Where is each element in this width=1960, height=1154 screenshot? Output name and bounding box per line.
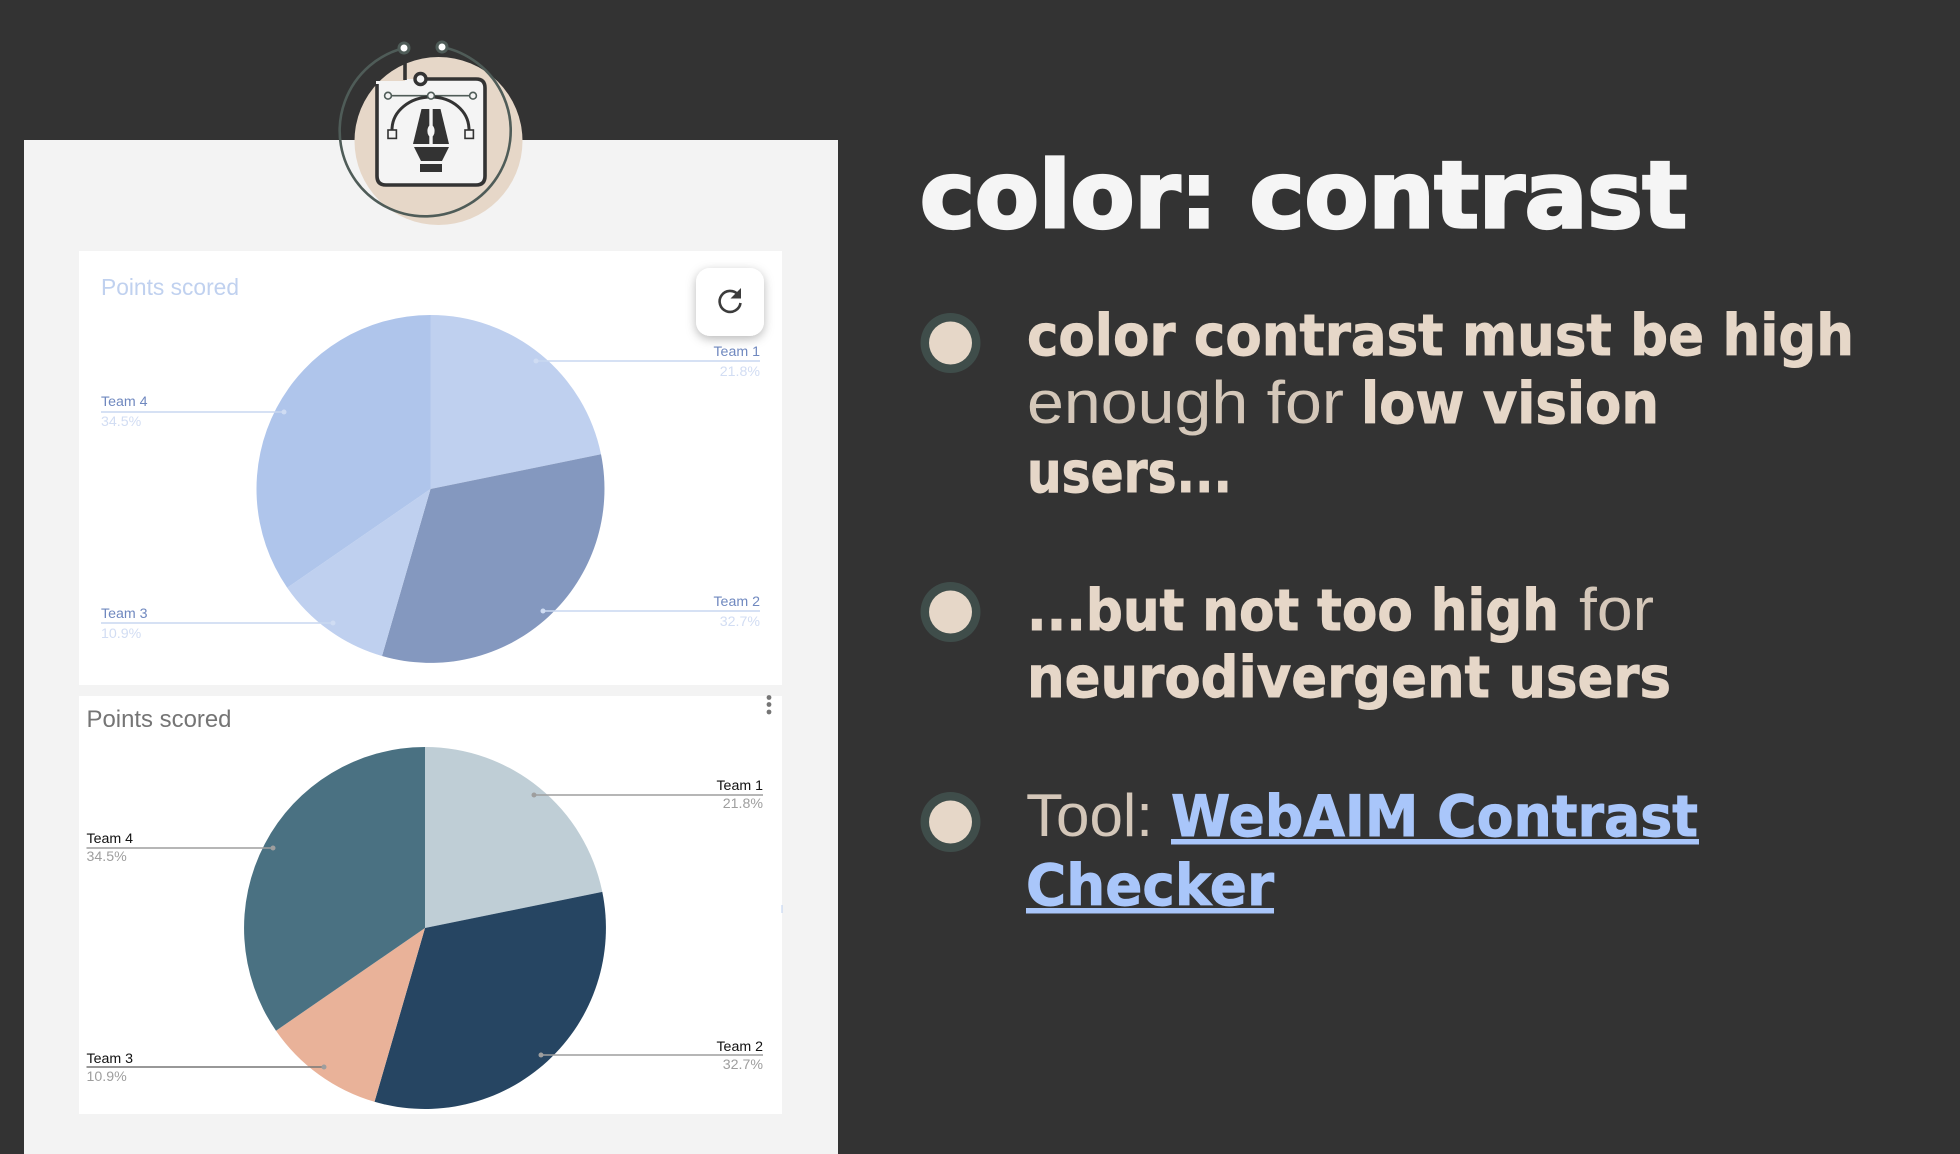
bullet text: ...but not too high [1027,578,1559,644]
label: team 1: Team 1 [716,778,763,794]
label: team 4: 34.5% [101,414,142,430]
label: team 2 [540,594,760,630]
bullet text with link: Checker [1026,853,1274,919]
label: team 3: Team 3 [101,606,148,622]
bullet marker [920,313,980,373]
title: color: contrast [920,142,1687,249]
label: team 3: 10.9% [86,1069,127,1085]
label: team 1: Team 1 [713,344,760,360]
label: team 4: Team 4 [86,831,133,847]
label: team 3 [86,1051,326,1085]
label: team 1 [534,344,760,380]
label: team 2 [538,1039,763,1073]
panel: chart comparison [24,140,838,1154]
label: team 4 [101,394,286,430]
bullet 1 [920,303,1854,506]
label: team 3 [101,606,336,642]
label: team 4: 34.5% [86,849,127,865]
bullet 2 [920,576,1671,711]
label: team 2: 32.7% [720,614,760,630]
label: team 3: Team 3 [86,1051,133,1067]
icon: vector pen tool [340,42,522,225]
label: team 3: 10.9% [101,626,142,642]
panel: low contrast pie chart [79,251,782,685]
chart title: low contrast: Points scored [101,274,239,300]
label: team 4 [86,831,276,865]
bullet text: low vision [1361,371,1659,437]
bullet text: enough for [1027,369,1344,436]
label: team 1: 21.8% [723,796,763,812]
label: team 1 [532,778,763,812]
bullet text: for [1579,576,1654,643]
bullet text [1027,576,1671,711]
bullet text [1027,303,1854,506]
bullet text: color contrast must be high [1027,303,1854,369]
label: team 4: Team 4 [101,394,148,410]
panel: accessible pie chart [79,695,782,1114]
chart title: accessible: Points scored [86,707,232,733]
pie: low contrast [256,315,604,663]
label: team 2: Team 2 [713,594,760,610]
bullet text: neurodivergent users [1027,645,1671,711]
refresh button [696,268,764,336]
bullet text with link [1026,782,1699,919]
label: team 2: Team 2 [716,1039,763,1055]
bullet 3 [920,782,1699,919]
pie: accessible [244,747,606,1109]
bullet text with link: Tool: [1026,782,1153,849]
bullet marker [920,792,980,852]
menu dots [767,695,771,714]
bullet marker [920,582,980,642]
bullet text with link: WebAIM Contrast [1171,784,1698,850]
label: team 2: 32.7% [723,1057,763,1073]
label: team 1: 21.8% [720,364,760,380]
bullet text: users... [1027,440,1232,506]
